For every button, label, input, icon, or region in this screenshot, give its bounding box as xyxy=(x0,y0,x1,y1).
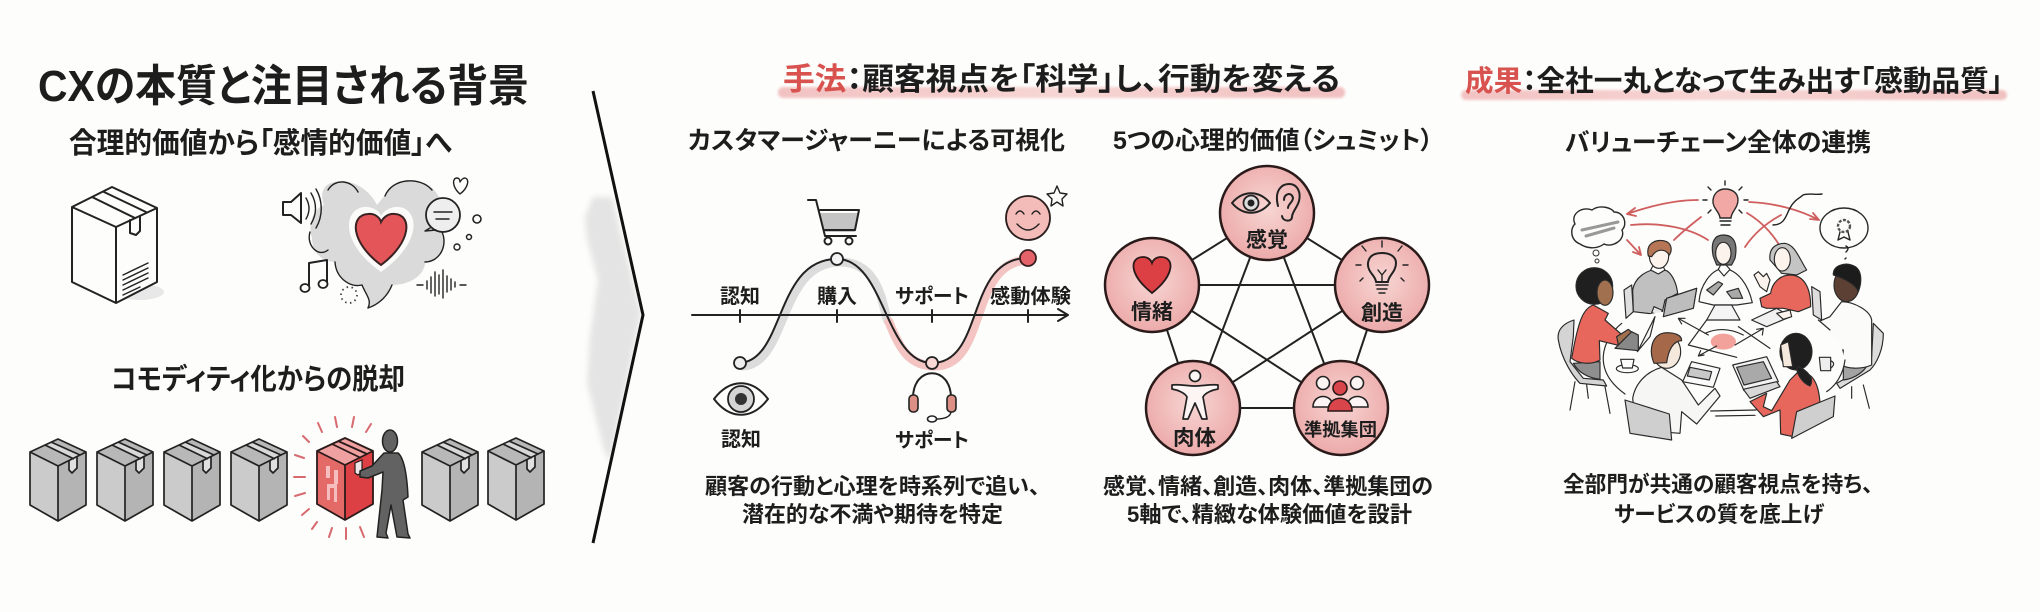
red highlighted box with person xyxy=(294,417,410,539)
heading: rational to emotional value: 合理的価値から「感情的価値」へ xyxy=(69,127,453,160)
person: man with tablet, back view xyxy=(1625,333,1720,440)
arrows: idea exchange xyxy=(1627,194,1822,255)
axis arrow xyxy=(692,309,1068,322)
node: creativity xyxy=(1335,238,1429,332)
node: body xyxy=(1146,361,1240,455)
title: CXの本質と注目される背景 xyxy=(38,62,529,111)
tablet on table xyxy=(1707,305,1740,320)
icon: coffee mug right xyxy=(1819,357,1834,371)
node: creativity: 創造 xyxy=(1361,302,1403,325)
grey box 1 xyxy=(30,439,86,521)
text: pentagram description: 5軸で、精緻な体験価値を設計 xyxy=(1127,502,1412,527)
text: pentagram description xyxy=(1103,474,1433,527)
text: pentagram description: 感覚、情緒、創造、肉体、準拠集団の xyxy=(1103,474,1433,499)
axis label: awareness: 認知 xyxy=(720,285,760,308)
icon: smiley with star xyxy=(1006,186,1067,240)
text: journey description: 潜在的な不満や期待を特定 xyxy=(742,502,1003,527)
person: woman with ponytail xyxy=(1733,333,1835,438)
laptop of man in grey xyxy=(1663,288,1697,317)
icon: plain cardboard box xyxy=(72,187,164,303)
grey box 4 xyxy=(231,439,287,521)
icon: shopping cart xyxy=(808,200,859,244)
commodity box row xyxy=(30,417,544,539)
illustration: round-table team collaboration xyxy=(1558,181,1883,440)
label: support: サポート xyxy=(895,429,969,452)
paper on table xyxy=(1752,308,1791,327)
text: collaboration description: サービスの質を底上げ xyxy=(1614,502,1825,527)
table edges xyxy=(1603,320,1845,416)
axis label: purchase: 購入 xyxy=(817,285,857,308)
icon: coffee cup left xyxy=(1616,359,1638,373)
icon: thought cloud xyxy=(1572,207,1625,263)
node: reference group xyxy=(1294,361,1388,455)
person: curly-haired woman in red xyxy=(1558,268,1655,413)
person: woman in red top xyxy=(1754,243,1811,312)
heading bar: method: 手法：顧客視点を「科学」し、行動を変える xyxy=(783,62,1340,97)
journey line xyxy=(740,258,1028,363)
table centre: shared customer viewpoint arrows xyxy=(1678,318,1770,357)
label: awareness: 認知 xyxy=(721,428,761,451)
node: body: 肉体 xyxy=(1173,427,1216,450)
subheading: five psychological values: 5つの心理的価値（シュミット） xyxy=(1113,127,1433,155)
icon: emotional heart cloud xyxy=(283,178,481,308)
subheading: value chain: バリューチェーン全体の連携 xyxy=(1565,129,1871,157)
text: collaboration description xyxy=(1563,472,1873,527)
node: reference group: 準拠集団 xyxy=(1304,419,1377,440)
chart: customer journey curve xyxy=(692,250,1071,369)
subheading: customer journey: カスタマージャーニーによる可視化 xyxy=(688,127,1065,155)
panel: outcome xyxy=(1461,65,2007,527)
panel: CX essence and background xyxy=(30,62,544,539)
icon: light bulb xyxy=(1703,181,1748,225)
icon: idea bubble with gear xyxy=(1820,208,1868,259)
person: woman in white blouse xyxy=(1699,235,1752,305)
hand on paper xyxy=(1777,310,1792,319)
heading: escape from commoditization: コモディティ化からの脱却 xyxy=(111,362,405,396)
text: collaboration description: 全部門が共通の顧客視点を持ち、 xyxy=(1563,472,1873,497)
grey box 7 xyxy=(488,438,544,520)
icon: headset xyxy=(909,373,956,422)
axis label: delight: 感動体験 xyxy=(990,284,1071,308)
heading bar: outcome: 成果：全社一丸となって生み出す「感動品質」 xyxy=(1465,65,2003,98)
node: sense: 感覚 xyxy=(1246,228,1288,252)
grey box 3 xyxy=(164,439,220,521)
axis label: support: サポート xyxy=(895,285,969,308)
divider: chevron with grey wash xyxy=(585,91,643,543)
icon: eye xyxy=(714,383,768,415)
text: journey description xyxy=(705,474,1040,527)
person: man in white shirt (back layer) xyxy=(1801,264,1883,408)
round table surface xyxy=(1603,308,1844,408)
person: man in grey sweater xyxy=(1633,240,1697,317)
node: emotion: 情緒 xyxy=(1131,301,1173,324)
grey box 6 xyxy=(422,439,478,521)
panel: method xyxy=(688,62,1433,527)
text: journey description: 顧客の行動と心理を時系列で追い、 xyxy=(705,474,1040,499)
people at the table (drawn at 3x, scaled down) xyxy=(1558,235,1883,440)
chart: Schmitt pentagram xyxy=(1105,166,1429,455)
back chairs xyxy=(1624,285,1822,320)
node: sense xyxy=(1220,166,1314,260)
node: emotion xyxy=(1105,238,1199,332)
grey box 2 xyxy=(97,439,153,521)
